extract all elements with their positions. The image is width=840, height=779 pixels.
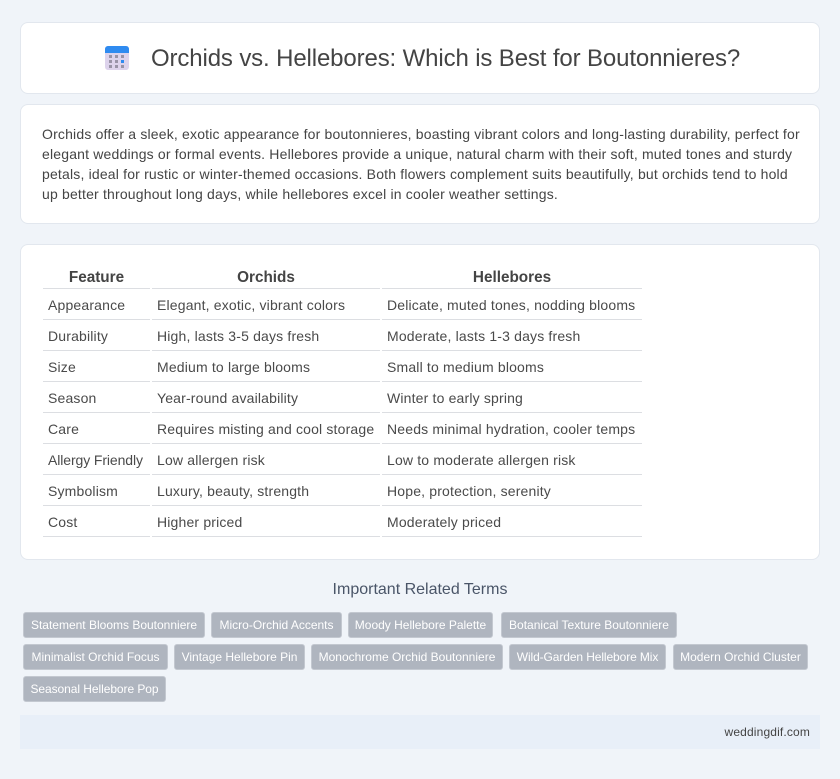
text block: introduction: elegant weddings or formal events. Hellebores provide a unique, natural charm with their soft, muted tones and sturdy bbox=[42, 146, 792, 162]
comparison table: Needs minimal hydration, cooler temps bbox=[387, 421, 635, 437]
comparison table: Cost bbox=[48, 514, 77, 530]
text block: introduction bbox=[42, 126, 800, 202]
comparison table: Winter to early spring bbox=[387, 390, 523, 406]
heading: related terms: Important Related Terms bbox=[333, 581, 507, 598]
comparison table: Luxury, beauty, strength bbox=[157, 483, 309, 499]
comparison table: Moderate, lasts 1-3 days fresh bbox=[387, 328, 580, 344]
related term tags: Seasonal Hellebore Pop bbox=[30, 682, 159, 696]
related term tags: Modern Orchid Cluster bbox=[680, 650, 801, 664]
comparison table: Small to medium blooms bbox=[387, 359, 544, 375]
related term tags bbox=[23, 612, 808, 702]
text block: introduction: Orchids offer a sleek, exotic appearance for boutonnieres, boasting vibrant colors and long-lasting durability, perfect for bbox=[42, 126, 800, 142]
comparison table: Size bbox=[48, 359, 76, 375]
comparison table: Requires misting and cool storage bbox=[157, 421, 374, 437]
related term tags: Statement Blooms Boutonniere bbox=[31, 618, 197, 632]
comparison table: Hellebores bbox=[473, 269, 551, 286]
related term tags: Monochrome Orchid Boutonniere bbox=[319, 650, 495, 664]
comparison table: Moderately priced bbox=[387, 514, 501, 530]
related term tags: Moody Hellebore Palette bbox=[355, 618, 486, 632]
comparison table bbox=[43, 269, 642, 537]
comparison table: Low allergen risk bbox=[157, 452, 265, 468]
footer source: weddingdif.com bbox=[725, 725, 810, 739]
comparison table: Allergy Friendly bbox=[48, 452, 143, 468]
title: Orchids vs. Hellebores: Which is Best for Boutonnieres? bbox=[151, 45, 740, 72]
comparison table: Year-round availability bbox=[157, 390, 298, 406]
panel: title card bbox=[20, 22, 820, 94]
icon: calendar bbox=[105, 46, 129, 70]
comparison table: Care bbox=[48, 421, 79, 437]
text block: introduction: petals, ideal for rustic or winter-themed occasions. Both flowers complement suits beautifully, but orchids tend to hold bbox=[42, 166, 788, 182]
comparison table: Low to moderate allergen risk bbox=[387, 452, 576, 468]
panel: comparison table card bbox=[20, 244, 820, 560]
footer bar bbox=[20, 715, 820, 749]
related term tags: Minimalist Orchid Focus bbox=[31, 650, 160, 664]
comparison table: High, lasts 3-5 days fresh bbox=[157, 328, 319, 344]
related term tags: Wild-Garden Hellebore Mix bbox=[517, 650, 658, 664]
comparison table: Durability bbox=[48, 328, 108, 344]
related term tags: Botanical Texture Boutonniere bbox=[509, 618, 669, 632]
comparison table: Symbolism bbox=[48, 483, 118, 499]
related term tags: Vintage Hellebore Pin bbox=[182, 650, 297, 664]
comparison table: Feature bbox=[69, 269, 124, 286]
comparison table: Appearance bbox=[48, 297, 125, 313]
comparison table: Hope, protection, serenity bbox=[387, 483, 551, 499]
panel: introduction bbox=[20, 104, 820, 224]
comparison table: Elegant, exotic, vibrant colors bbox=[157, 297, 345, 313]
text block: introduction: up better throughout long days, while hellebores excel in cooler weather settings. bbox=[42, 186, 558, 202]
comparison table: Medium to large blooms bbox=[157, 359, 310, 375]
related term tags: Micro-Orchid Accents bbox=[219, 618, 334, 632]
comparison table: Season bbox=[48, 390, 97, 406]
comparison table: Higher priced bbox=[157, 514, 242, 530]
comparison table: Orchids bbox=[237, 269, 295, 286]
comparison table: Delicate, muted tones, nodding blooms bbox=[387, 297, 635, 313]
